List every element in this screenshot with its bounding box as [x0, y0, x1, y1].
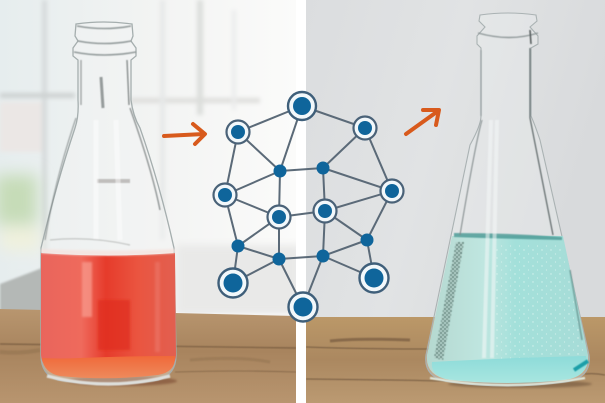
teal liquid	[427, 236, 588, 383]
liquid bubbles	[495, 244, 585, 360]
panel: right wooden table	[306, 317, 605, 403]
network diagram	[214, 92, 404, 322]
grey wall corner	[0, 268, 42, 312]
red liquid	[41, 253, 176, 370]
liquid base	[42, 356, 175, 378]
glass highlights right	[430, 30, 588, 385]
network links	[225, 106, 392, 307]
liquid base	[432, 356, 587, 382]
glass body right flask	[426, 13, 589, 386]
panel: left background with window	[0, 0, 301, 315]
arrow: right orange arrow	[406, 110, 439, 134]
shadow under left flask	[67, 376, 177, 386]
liquid surface line	[454, 233, 562, 240]
speckled strip	[434, 242, 464, 360]
shadow under right flask	[448, 380, 592, 388]
panel: right background wall	[306, 0, 605, 322]
glass highlights	[45, 26, 170, 384]
medium nodes	[214, 116, 404, 228]
node centres	[218, 97, 399, 316]
panel: left wooden table	[0, 309, 296, 403]
glass body left flask	[41, 22, 176, 384]
right flask with teal liquid	[426, 13, 592, 388]
left flask with red liquid	[41, 22, 177, 386]
large nodes	[218, 92, 388, 322]
liquid reflections	[41, 249, 175, 352]
arrow: left orange arrow	[164, 124, 205, 144]
divider: white centre stripe	[296, 0, 306, 403]
